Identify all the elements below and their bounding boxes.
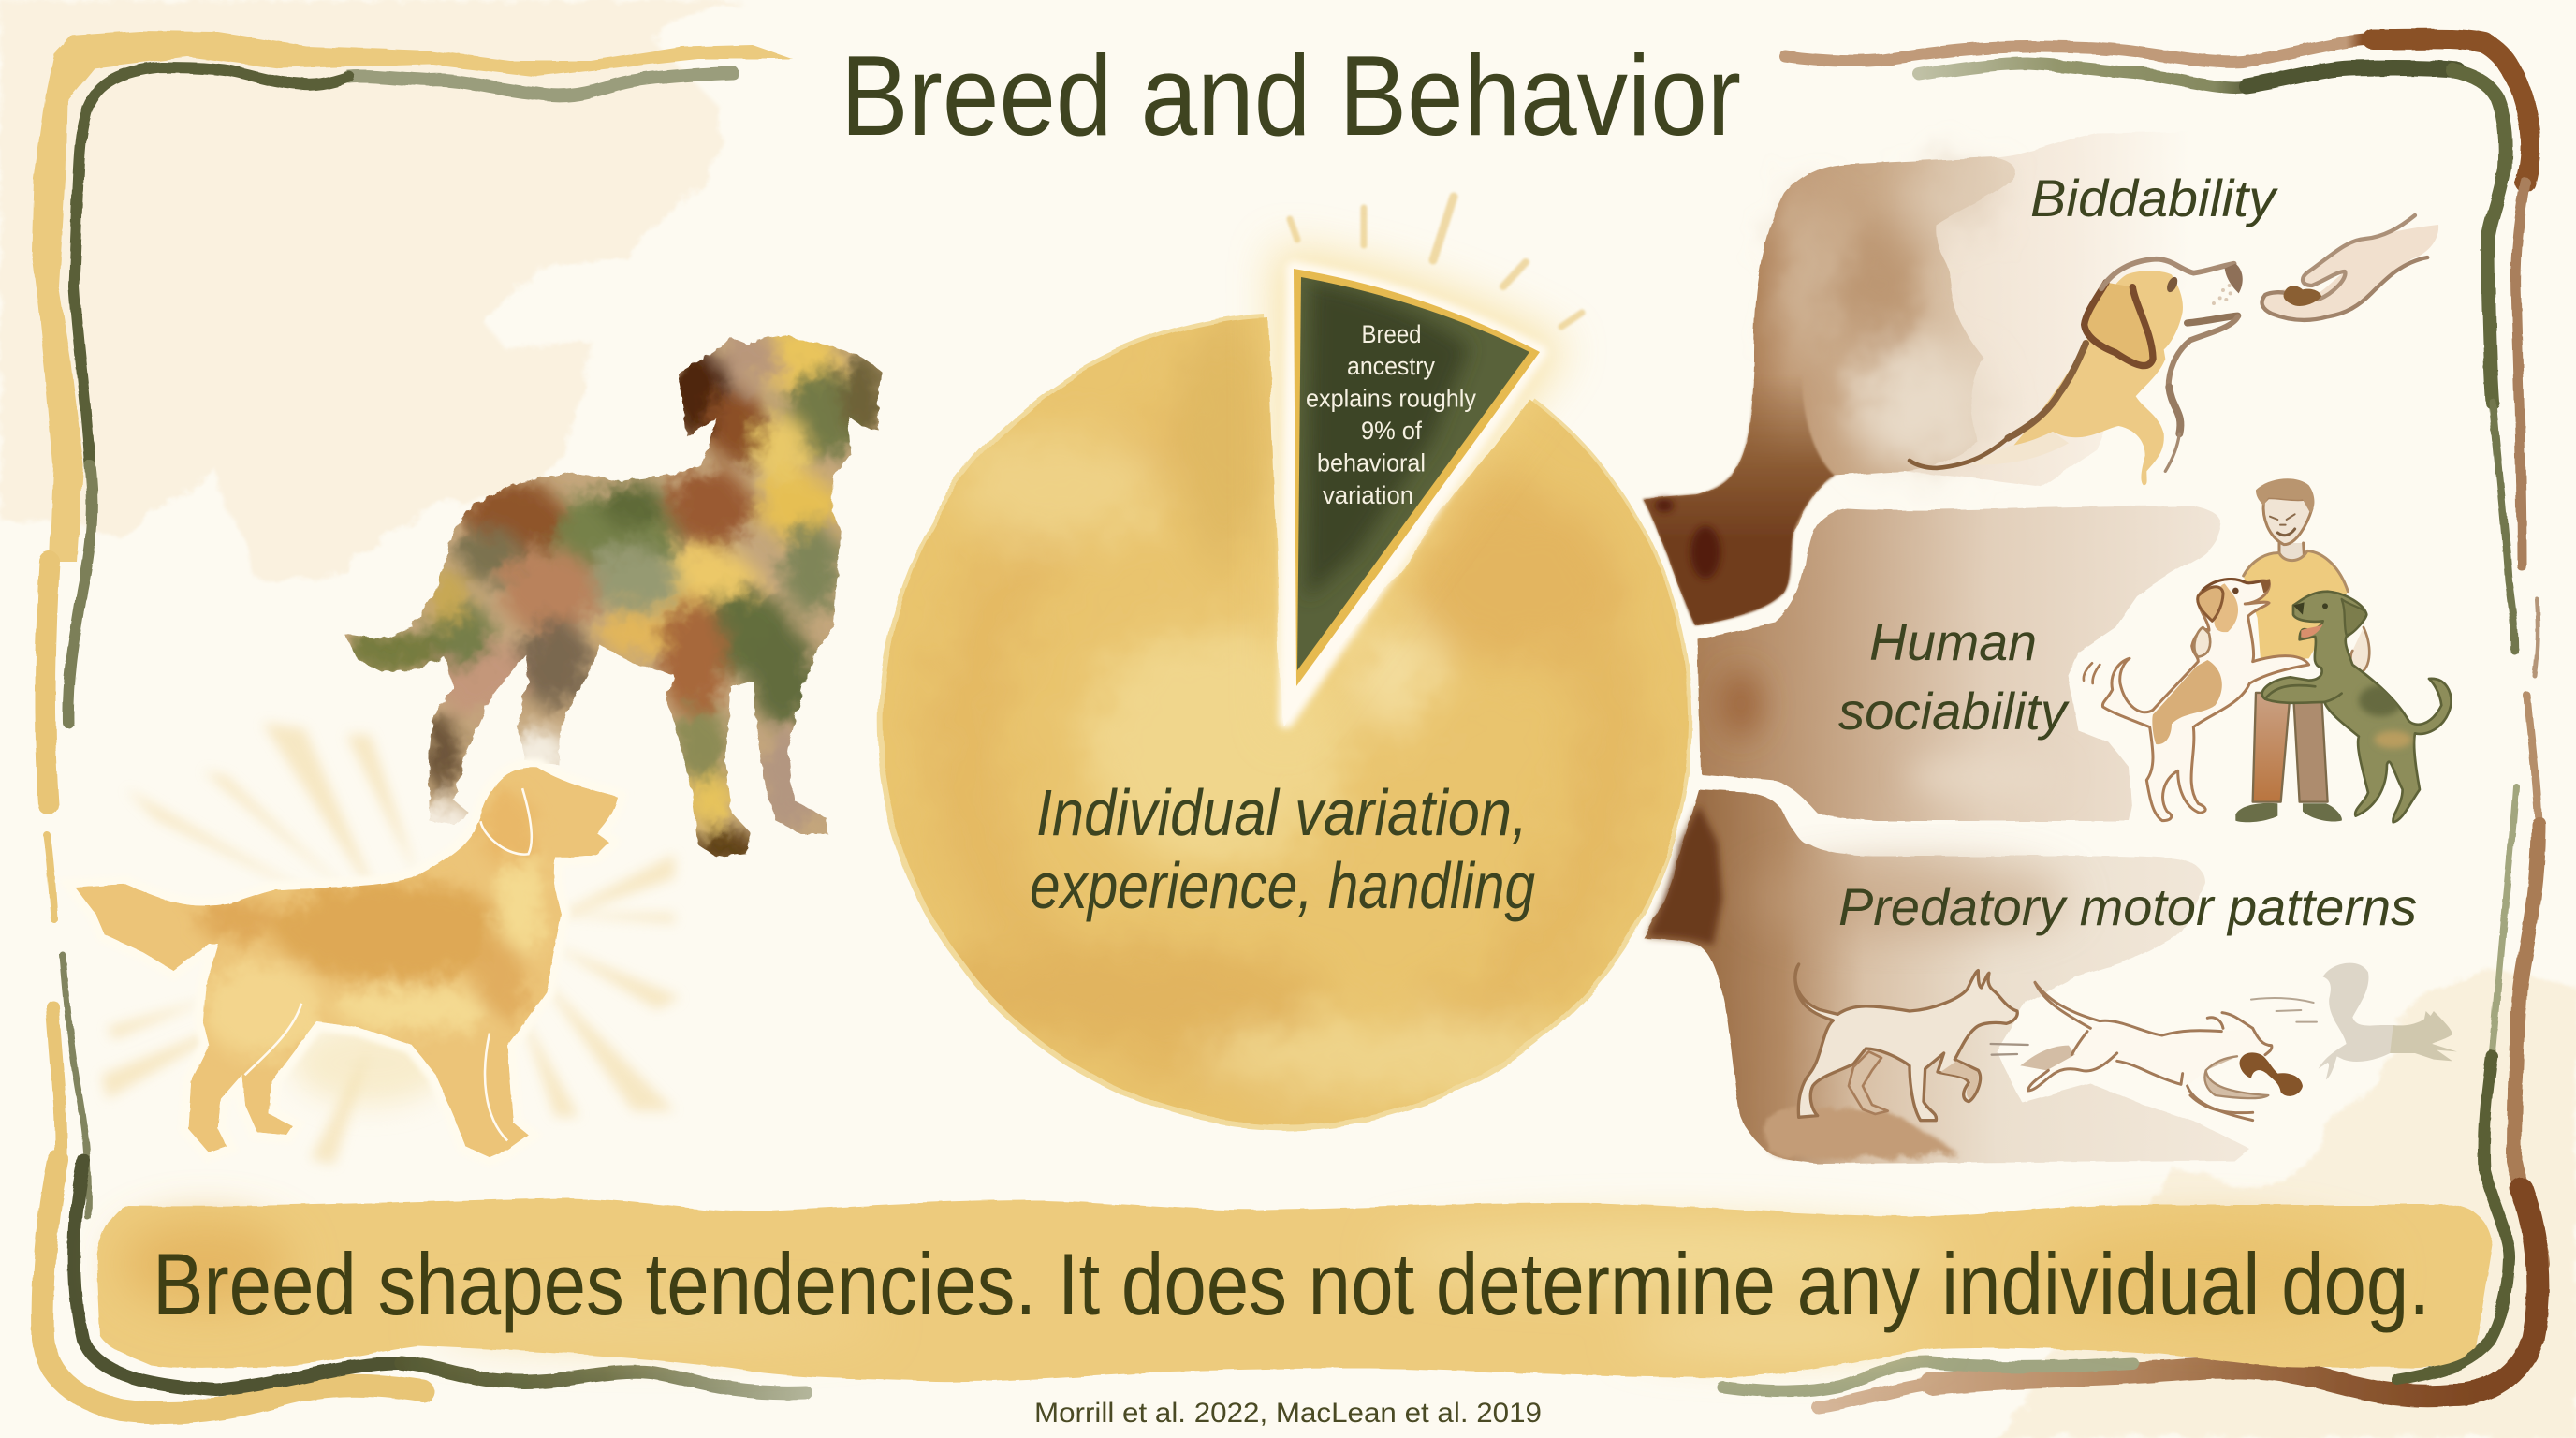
breed slice dark green fill [1297, 277, 1530, 670]
border: right brown strand [1785, 39, 2542, 1407]
icon: hand offering treat [2262, 215, 2438, 320]
panel: human sociability [1698, 478, 2452, 822]
pie chart [877, 197, 1693, 1129]
panel 3 label: Predatory motor patterns [1838, 877, 2417, 936]
icon: person with two dogs [2084, 478, 2452, 822]
speed lines [2251, 998, 2317, 1022]
banner wash [96, 1198, 2493, 1382]
breed ancestry label: explains roughly [1306, 384, 1476, 412]
panel 1 brown body [1643, 157, 2015, 625]
panel 2 label: sociability [1838, 682, 2070, 741]
title: Breed and Behavior [841, 32, 1741, 159]
watercolor wash: top left [0, 0, 744, 580]
dog body [2008, 271, 2183, 485]
person [2235, 478, 2369, 822]
icon: fleeing squirrel [2319, 963, 2457, 1079]
pie: outer pale bleed ring [877, 314, 1693, 1129]
breed ancestry label: variation [1323, 481, 1413, 509]
panel 1 pale wash [1872, 131, 2190, 487]
panel 2 tonal patches [1720, 670, 2059, 800]
breed slice gold edge [1294, 269, 1540, 686]
glow beneath golden retriever belly [293, 1021, 447, 1105]
panel 2 label: Human [1869, 612, 2037, 671]
panel 2 wash [1698, 506, 2221, 821]
left dog [2084, 579, 2309, 821]
panel: biddability [1643, 131, 2438, 625]
dogs illustration: mixed-breed and golden retriever [75, 326, 886, 1165]
dog nose and eye [2225, 264, 2243, 293]
breed slice highlight [1286, 269, 1540, 721]
dog ear [2085, 283, 2153, 366]
individual variation label: Individual variation, [1036, 776, 1528, 849]
panel 2 label [1838, 612, 2070, 741]
icon: chasing dog with toy [2020, 982, 2317, 1121]
panel 1 label: Biddability [2030, 169, 2278, 227]
speed lines [1991, 1044, 2028, 1055]
dog outline strokes [1910, 259, 2238, 471]
border: lower-left gold strands [43, 562, 423, 1413]
icon: golden retriever silhouette [75, 768, 618, 1157]
icon: stalking dog [1795, 964, 2028, 1121]
breed ancestry label: behavioral [1317, 449, 1426, 477]
takeaway banner [96, 1198, 2493, 1382]
sun rays above breed slice [1290, 197, 1582, 327]
breed ancestry label: 9% of [1361, 417, 1422, 445]
glow around golden retriever [75, 768, 618, 1157]
panel 3 dark tip [1647, 805, 1722, 946]
breed ancestry label: ancestry [1347, 352, 1435, 380]
border: left dark green strand [63, 67, 805, 1392]
panel 1 dark neck [1643, 365, 1835, 625]
panel 1 tonal interior [1793, 174, 1998, 468]
border: top-left gold strand [32, 31, 793, 562]
panel 3 darker lower-left wash [1764, 1105, 1958, 1161]
panel 3 wash [1644, 789, 2249, 1164]
individual variation label [1030, 776, 1535, 922]
breed ancestry label: Breed [1361, 320, 1421, 348]
border: right dark green strand [1722, 64, 2516, 1391]
icon: sunburst rays behind golden retriever [101, 723, 681, 1165]
panel 3 upper tan shading [1750, 861, 2069, 936]
individual variation label: experience, handling [1030, 849, 1535, 922]
ear and leg highlight lines [244, 788, 532, 1140]
toy [2240, 1052, 2303, 1096]
tail wash [1972, 432, 2069, 465]
icon: mixed-breed dog silhouette with mottled colours [341, 326, 886, 867]
pie: individual variation slice [883, 309, 1690, 1124]
panel 1 dark spots [1655, 499, 1720, 579]
right dog [2262, 592, 2452, 822]
watercolor wash: bottom right [1991, 967, 2576, 1438]
banner tonal patches [122, 1222, 2378, 1351]
panel: predatory motor patterns [1644, 789, 2457, 1164]
breed ancestry label [1306, 320, 1476, 509]
breed slice glow [1294, 269, 1540, 686]
icon: dog reaching for treat [1910, 259, 2243, 485]
source citation: Morrill et al. 2022, MacLean et al. 2019 [1034, 1398, 1542, 1429]
